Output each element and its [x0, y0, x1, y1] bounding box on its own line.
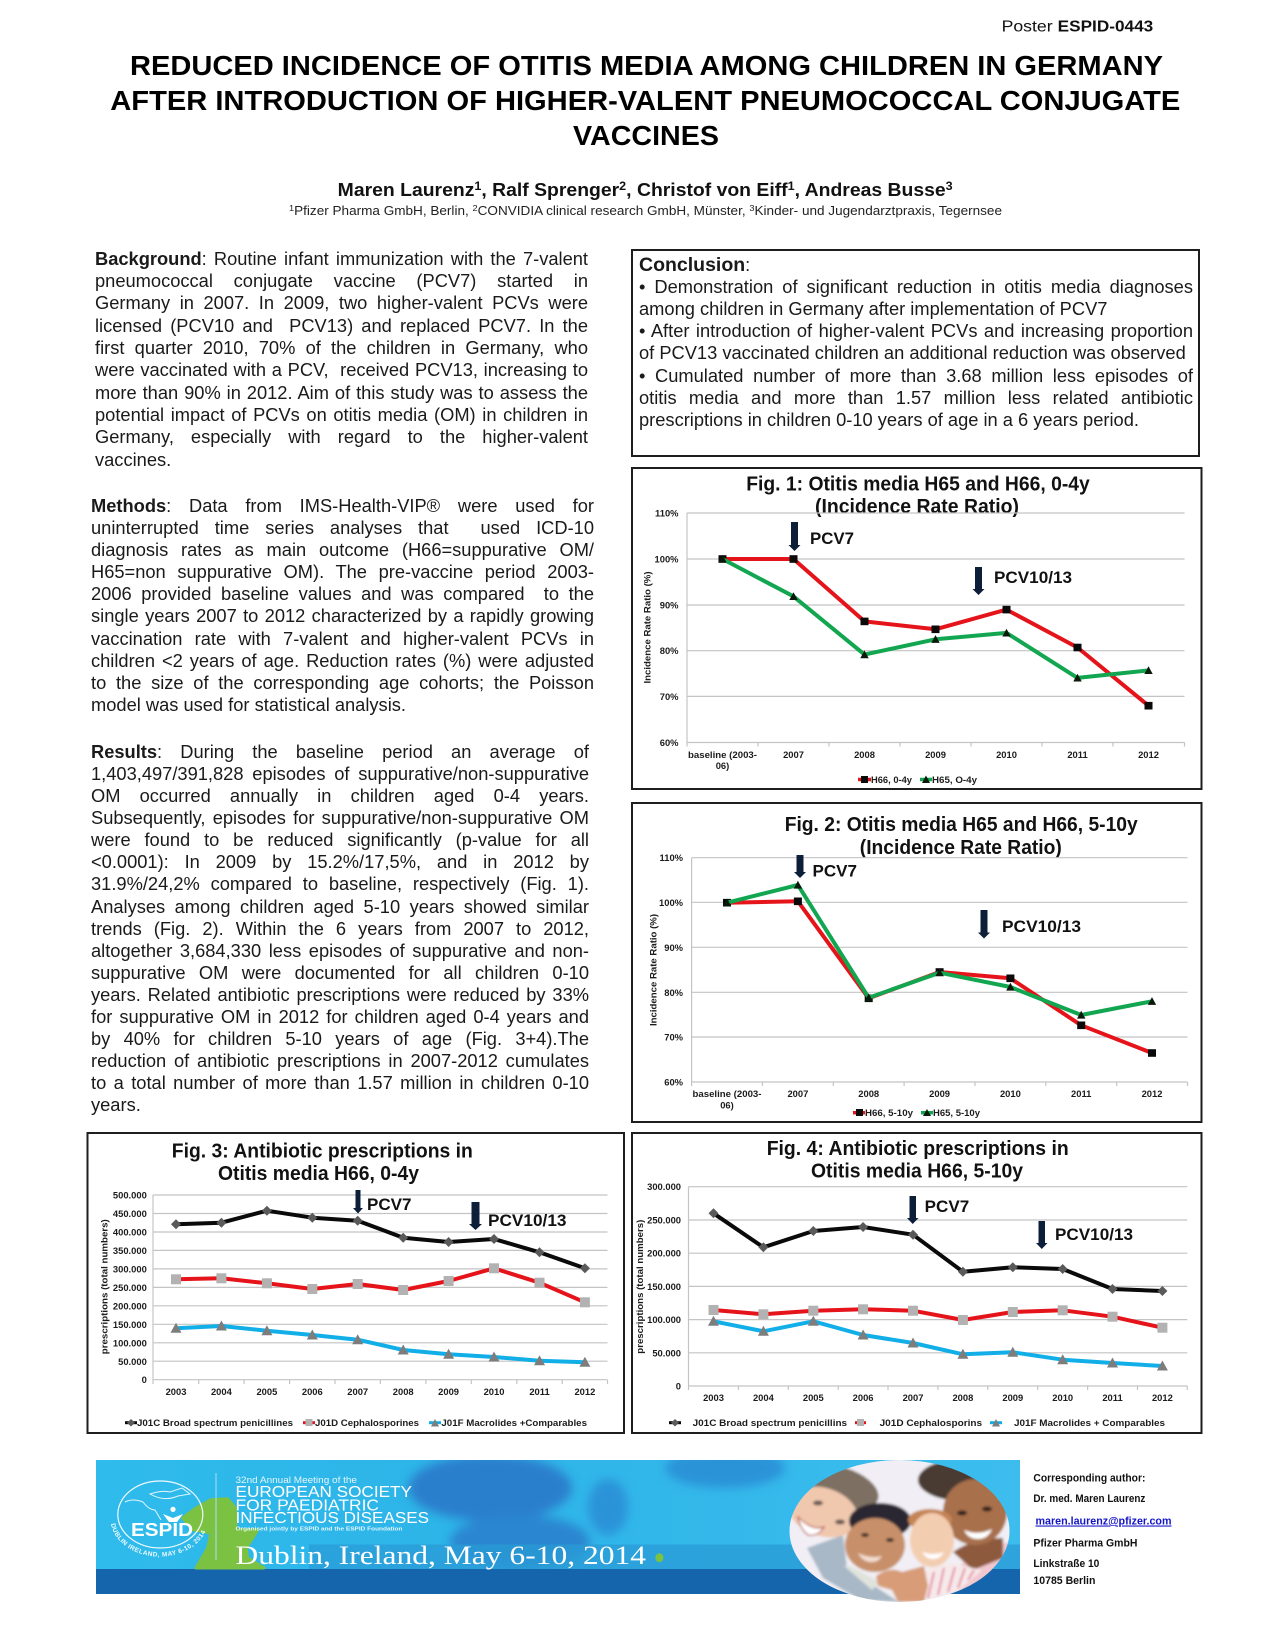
Fig. 3 x axis labels: 2007	[347, 1386, 368, 1397]
Fig. 1 line: H66	[722, 559, 1148, 706]
Fig. 1 y axis labels	[655, 508, 679, 748]
text block: background: pneumococcal conjugate vaccine (PCV7) started in	[95, 270, 588, 291]
Fig. 2 y axis labels: 70%	[664, 1032, 684, 1042]
panel: Fig. 2 chart	[632, 803, 1202, 1122]
Fig. 4 x axis labels: 2012	[1152, 1392, 1173, 1403]
Fig. 1 x axis labels: 2010	[996, 749, 1017, 760]
Fig. 2 line: H65	[727, 885, 1152, 1015]
text block: results: Results: During the baseline period an average of	[91, 741, 589, 762]
panel: conclusion box	[632, 250, 1199, 456]
Fig. 3 y axis labels: 0	[142, 1374, 147, 1385]
Fig. 3 x axis labels: 2004	[211, 1386, 233, 1397]
Fig. 4 legend: J01C Broad spectrum penicillins	[693, 1417, 847, 1428]
Fig. 2 y axis labels: 80%	[664, 987, 684, 998]
Fig. 4 x axis labels: 2004	[753, 1392, 775, 1403]
label: PCV7: PCV7	[812, 862, 857, 881]
Fig. 1 title	[746, 474, 1091, 518]
Fig. 3 title: Fig. 3: Antibiotic prescriptions in	[172, 1140, 473, 1162]
Fig. 2 legend: H66, 5-10y	[865, 1107, 914, 1118]
banner society text	[236, 1475, 429, 1532]
affiliations: 1	[289, 203, 294, 213]
text block: results: years.	[91, 1094, 141, 1115]
poster number: ESPID-0443	[1058, 18, 1154, 36]
affiliations: Kinder- und Jugendarztpraxis, Tegernsee	[755, 204, 1002, 218]
label: PCV10/13: PCV10/13	[994, 568, 1072, 587]
Fig. 3 line: J01D	[176, 1268, 585, 1302]
Fig. 4 line: J01F	[714, 1321, 1162, 1366]
Fig. 3 x axis labels: 2012	[574, 1386, 595, 1397]
Fig. 3 line: J01F	[176, 1326, 585, 1362]
Fig. 1 x axis labels: 2009	[925, 749, 946, 760]
Fig. 4 x axis labels	[703, 1392, 1173, 1403]
Fig. 3 y axis labels: 450.000	[113, 1208, 147, 1219]
Fig. 4 y axis labels: 300.000	[647, 1181, 681, 1192]
text block: conclusion: Conclusion:	[639, 254, 750, 276]
authors: Maren Laurenz	[338, 179, 468, 200]
arrow: PCV7	[907, 1196, 918, 1224]
text block: conclusion: of PCV13 vaccinated children an additional reduction was observed	[639, 342, 1186, 363]
text block: background: licensed (PCV10 and PCV13) and replaced PCV7. In the	[95, 315, 588, 336]
authors: , Christof von Eiff	[626, 179, 788, 200]
Fig. 4 y axis labels: 200.000	[647, 1248, 681, 1259]
text block: conclusion: • After introduction of higher-valent PCVs and increasing proportion	[639, 320, 1193, 341]
panel: Fig. 4 chart	[632, 1133, 1202, 1433]
Fig. 1 y axis labels: 100%	[655, 554, 679, 564]
text block: methods: diagnosis rates as main outcome (H66=suppurative OM/	[91, 539, 594, 560]
Fig. 3 legend: J01D Cephalosporines	[315, 1417, 419, 1428]
Fig. 3 y axis labels: 250.000	[113, 1282, 147, 1293]
corresponding author block: Linkstraße 10	[1033, 1558, 1099, 1570]
Fig. 1 legend	[858, 774, 978, 785]
Fig. 3 y axis labels: 500.000	[113, 1190, 147, 1200]
corresponding author block: 10785 Berlin	[1033, 1575, 1095, 1587]
Fig. 2 x axis labels	[692, 1088, 1162, 1110]
Fig. 2 line: H66	[727, 901, 1152, 1053]
Fig. 4 title: Otitis media H66, 5-10y	[811, 1160, 1024, 1182]
Fig. 3 y axis labels	[113, 1190, 147, 1385]
text block: methods: to the size of the corresponding age cohorts; the Poisson	[91, 672, 594, 693]
banner society text: 32nd Annual Meeting of the	[236, 1475, 357, 1486]
Fig. 4 x axis labels: 2006	[853, 1392, 874, 1403]
Fig. 2 legend	[853, 1107, 981, 1118]
Fig. 4 x axis labels: 2009	[1002, 1392, 1023, 1403]
Fig. 2 legend: H65, 5-10y	[933, 1107, 981, 1118]
Fig. 3 x axis labels: 2011	[529, 1386, 550, 1397]
Fig. 3 y axis labels: 300.000	[113, 1263, 147, 1274]
text block: background: first quarter 2010, 70% of the children in Germany, who	[95, 337, 588, 358]
authors: 3	[946, 179, 953, 193]
Fig. 2 y axis labels	[659, 852, 684, 1088]
Fig. 2 title: Fig. 2: Otitis media H65 and H66, 5-10y	[785, 814, 1139, 836]
Fig. 4 y axis labels: 150.000	[647, 1281, 681, 1292]
Fig. 1 y axis labels: 60%	[660, 737, 679, 748]
corresponding author block: maren.laurenz@pfizer.com	[1036, 1516, 1172, 1528]
Fig. 4 title	[767, 1138, 1069, 1182]
label: PCV10/13: PCV10/13	[1055, 1225, 1133, 1244]
Fig. 3 title	[172, 1140, 473, 1185]
text block: background: potential impact of PCVs on otitis media (OM) in children in	[95, 404, 588, 425]
Fig. 3 y axis title: prescriptions (total numbers)	[100, 1219, 110, 1354]
Fig. 4 y axis labels: 50.000	[652, 1347, 681, 1358]
Fig. 3 x axis labels: 2008	[393, 1386, 414, 1397]
banner society text: FOR PAEDIATRIC	[236, 1497, 379, 1514]
text block: background: more than 90% in 2012. Aim of this study was to assess the	[95, 382, 588, 403]
Fig. 2 x axis labels: 2010	[1000, 1088, 1021, 1099]
authors: 1	[788, 179, 795, 193]
Fig. 3 y axis labels: 200.000	[113, 1300, 147, 1311]
arrow: PCV7	[353, 1190, 363, 1214]
Fig. 2 x axis labels: 2009	[929, 1088, 950, 1099]
banner society text: INFECTIOUS DISEASES	[236, 1510, 429, 1527]
text block: results: years. Related antibiotic prescriptions were reduced by 33%	[91, 984, 589, 1005]
Fig. 3 legend: J01C Broad spectrum penicillines	[137, 1417, 293, 1428]
text block: results: OM occurred annually in children aged 0-4 years.	[91, 785, 589, 806]
label: PCV10/13: PCV10/13	[1002, 917, 1081, 936]
authors: 1	[474, 179, 482, 193]
text block: background: Germany in 2007. In 2009, two higher-valent PCVs were	[95, 292, 588, 313]
text block: methods: 2006 provided baseline values and was compared to the	[91, 583, 594, 604]
Fig. 3 y axis labels: 350.000	[113, 1245, 147, 1256]
Fig. 2 x axis labels: 06)	[720, 1100, 734, 1110]
Fig. 2 y axis labels: 100%	[659, 897, 684, 908]
label: PCV7: PCV7	[810, 529, 854, 548]
Fig. 1 x axis labels	[688, 749, 1159, 771]
Fig. 4 legend	[669, 1417, 1165, 1428]
Fig. 4 y axis labels	[647, 1181, 681, 1392]
arrow: PCV10/13	[972, 567, 984, 595]
Fig. 3 x axis labels: 2003	[166, 1386, 186, 1397]
Fig. 1 x axis labels: 06)	[716, 760, 729, 771]
banner location and date: Dublin, Ireland, May 6-10, 2014	[236, 1541, 646, 1570]
icon: ESPID globe logo: ESPID	[131, 1520, 193, 1540]
text block: results: by 40% for children 5-10 years of age (Fig. 3+4).The	[91, 1028, 589, 1049]
text block: conclusion: prescriptions in children 0-10 years of age in a 6 years period.	[639, 409, 1139, 430]
text block: methods	[91, 495, 594, 715]
Fig. 1 x axis labels: 2008	[854, 749, 875, 760]
affiliations: Pfizer Pharma GmbH, Berlin,	[294, 204, 473, 218]
Fig. 3 x axis labels: 2009	[438, 1386, 459, 1397]
text block: results: reduction of antibiotic prescriptions in 2007-2012 cumulates	[91, 1050, 589, 1071]
Fig. 4 x axis labels: 2007	[903, 1392, 923, 1403]
Fig. 3 x axis labels: 2006	[302, 1386, 323, 1397]
Fig. 3 x axis labels: 2010	[484, 1386, 504, 1397]
Fig. 4 y axis labels: 100.000	[647, 1314, 681, 1325]
Fig. 4 x axis labels: 2005	[803, 1392, 824, 1403]
label: PCV7: PCV7	[925, 1197, 969, 1216]
corresponding author block	[1033, 1472, 1172, 1587]
poster number: Poster	[1002, 18, 1053, 36]
Fig. 3 y axis labels: 100.000	[113, 1337, 147, 1348]
Fig. 1 x axis labels: 2011	[1067, 749, 1088, 760]
text block: results: to a total number of more than 1.57 million in children 0-10	[91, 1072, 589, 1093]
arrow: PCV7	[794, 855, 806, 878]
text block: methods: Methods: Data from IMS-Health-VIP® were used for	[91, 495, 594, 516]
text block: background: Germany, especially with regard to the higher-valent	[95, 426, 588, 447]
poster number	[1002, 18, 1154, 36]
Fig. 1 y axis labels: 90%	[660, 600, 679, 610]
Fig. 1 legend: H65, O-4y	[932, 774, 978, 785]
icon: green dot	[655, 1553, 663, 1562]
Fig. 2 title: (Incidence Rate Ratio)	[860, 837, 1062, 859]
Fig. 1 y axis labels: 70%	[660, 691, 679, 702]
text block: results: Subsequently, episodes for suppurative/non-suppurative OM	[91, 807, 589, 828]
text block: background	[95, 248, 588, 470]
corresponding author block: Dr. med. Maren Laurenz	[1033, 1493, 1146, 1505]
title: REDUCED INCIDENCE OF OTITIS MEDIA AMONG CHILDREN IN GERMANY	[130, 50, 1163, 81]
Fig. 1 y axis title: Incidence Rate Ratio (%)	[642, 572, 654, 683]
banner: ESPID 2014 meeting	[96, 1460, 1020, 1602]
text block: results: 31.9%/24,2% compared to baseline, respectively (Fig. 1).	[91, 873, 589, 894]
text block: conclusion: • Cumulated number of more than 3.68 million less episodes of	[639, 365, 1193, 386]
text block: results: Analyses among children aged 5-10 years showed similar	[91, 896, 589, 917]
Fig. 2 x axis labels: 2012	[1142, 1088, 1162, 1099]
panel: Fig. 3 chart	[88, 1133, 624, 1433]
arrow: PCV7	[788, 522, 800, 551]
text block: conclusion	[639, 254, 1193, 430]
icon: ESPID globe logo: DUBLIN IRELAND, MAY 6-10, 2014	[111, 1523, 206, 1558]
title: VACCINES	[573, 120, 719, 151]
Fig. 1 x axis labels: baseline (2003-	[688, 749, 757, 760]
Fig. 1 y axis labels: 80%	[660, 645, 679, 656]
Fig. 4 legend: J01D Cephalosporins	[880, 1417, 982, 1428]
Fig. 2 x axis labels: 2008	[858, 1088, 879, 1099]
text block: results: for suppurative OM in 2012 for children aged 0-4 years and	[91, 1006, 589, 1027]
text block: background: Background: Routine infant immunization with the 7-valent	[95, 248, 588, 268]
Fig. 4 x axis labels: 2003	[703, 1392, 724, 1403]
Fig. 2 x axis labels: 2011	[1071, 1088, 1091, 1099]
text block: results: were found to be reduced significantly (p-value for all	[91, 829, 589, 850]
Fig. 1 title: Fig. 1: Otitis media H65 and H66, 0-4y	[746, 474, 1091, 496]
Fig. 4 line: J01C	[714, 1213, 1162, 1291]
Fig. 2 x axis labels: 2007	[787, 1088, 808, 1099]
Fig. 4 y axis labels: 250.000	[647, 1214, 681, 1226]
authors: , Ralf Sprenger	[481, 179, 619, 200]
arrow: PCV10/13	[1036, 1221, 1048, 1249]
text block: results: altogether 3,684,330 less episodes of suppurative and non-	[91, 940, 589, 961]
text block: methods: children <2 years of age. Reduction rates (%) were adjusted	[91, 650, 594, 671]
title	[110, 50, 1180, 151]
title: AFTER INTRODUCTION OF HIGHER-VALENT PNEUMOCOCCAL CONJUGATE	[110, 85, 1180, 116]
Fig. 4 legend: J01F Macrolides + Comparables	[1014, 1417, 1165, 1428]
arrow: PCV10/13	[978, 910, 990, 938]
Fig. 1 x axis labels: 2012	[1138, 749, 1159, 760]
Fig. 4 x axis labels: 2010	[1052, 1392, 1073, 1403]
text block: conclusion: otitis media and more than 1.57 million less related antibiotic	[639, 387, 1193, 408]
text block: results	[91, 741, 589, 1115]
banner society text: Organised jointly by ESPID and the ESPID Foundation	[236, 1526, 403, 1532]
Fig. 4 x axis labels: 2008	[952, 1392, 973, 1403]
Fig. 1 title: (Incidence Rate Ratio)	[815, 496, 1019, 518]
text block: conclusion: among children in Germany after implementation of PCV7	[639, 298, 1107, 319]
text block: methods: H65=non suppurative OM). The pre-vaccine period 2003-	[91, 561, 594, 582]
label: PCV7: PCV7	[367, 1195, 412, 1214]
Fig. 3 legend	[125, 1417, 587, 1428]
Fig. 2 y axis title: Incidence Rate Ratio (%)	[648, 914, 660, 1026]
Fig. 3 y axis labels: 50.000	[118, 1356, 147, 1367]
affiliations: 2	[473, 203, 478, 213]
panel: Fig. 1 chart	[632, 468, 1202, 789]
affiliations: 3	[749, 203, 755, 213]
text block: results: trends (Fig. 2). Within the 6 years from 2007 to 2012,	[91, 918, 589, 939]
text block: results: suppurative OM were documented for all children 0-10	[91, 962, 589, 983]
icon: ESPID globe logo	[111, 1480, 206, 1558]
authors: 2	[619, 179, 627, 193]
label: PCV10/13: PCV10/13	[488, 1211, 566, 1230]
Fig. 3 legend: J01F Macrolides +Comparables	[441, 1417, 587, 1428]
authors: , Andreas Busse	[795, 179, 946, 200]
Fig. 2 y axis labels: 60%	[664, 1076, 684, 1088]
Fig. 3 x axis labels: 2005	[256, 1386, 277, 1397]
text block: background: vaccines.	[95, 449, 171, 470]
corresponding author block: Pfizer Pharma GmbH	[1033, 1538, 1138, 1550]
Fig. 3 line: J01C	[176, 1211, 585, 1268]
text block: methods: single years 2007 to 2012 characterized by a rapidly growing	[91, 605, 594, 626]
text block: results: 1,403,497/391,828 episodes of suppurative/non-suppurative	[91, 763, 589, 784]
Fig. 3 y axis labels: 150.000	[113, 1319, 147, 1330]
Fig. 2 y axis labels: 110%	[660, 852, 684, 863]
Fig. 4 y axis title: prescriptions (total numbers)	[635, 1220, 646, 1354]
text block: methods: vaccination rate with 7-valent and higher-valent PCVs in	[91, 628, 594, 649]
Fig. 3 y axis labels: 400.000	[113, 1226, 147, 1238]
banner society text: EUROPEAN SOCIETY	[236, 1484, 413, 1501]
icon: green shamrock	[183, 1499, 264, 1568]
Fig. 1 y axis labels: 110%	[655, 508, 679, 518]
Fig. 1 legend: H66, 0-4y	[871, 774, 913, 785]
Fig. 2 x axis labels: baseline (2003-	[692, 1088, 762, 1099]
Fig. 1 line: H65	[722, 559, 1148, 678]
Fig. 4 y axis labels: 0	[676, 1380, 681, 1392]
corresponding author block: Corresponding author:	[1033, 1472, 1145, 1484]
photo: four smiling children	[790, 1460, 1010, 1602]
text block: background: were vaccinated with a PCV, received PCV13, increasing to	[95, 359, 588, 380]
text block: results: <0.0001): In 2009 by 15.2%/17,5%, and in 2012 by	[91, 851, 589, 872]
Fig. 2 title	[785, 814, 1139, 859]
Fig. 2 y axis labels: 90%	[664, 942, 684, 953]
text block: methods: uninterrupted time series analyses that used ICD-10	[91, 517, 594, 538]
Fig. 4 x axis labels: 2011	[1102, 1392, 1123, 1403]
text block: methods: model was used for statistical analysis.	[91, 694, 406, 715]
Fig. 4 line: J01D	[714, 1309, 1162, 1328]
affiliations: CONVIDIA clinical research GmbH, Münster,	[478, 204, 749, 218]
Fig. 3 title: Otitis media H66, 0-4y	[218, 1163, 420, 1185]
Fig. 1 x axis labels: 2007	[783, 749, 804, 760]
Fig. 4 title: Fig. 4: Antibiotic prescriptions in	[767, 1138, 1069, 1160]
text block: conclusion: • Demonstration of significant reduction in otitis media diagnoses	[639, 276, 1193, 297]
Fig. 3 x axis labels	[166, 1386, 595, 1397]
arrow: PCV10/13	[469, 1202, 482, 1230]
